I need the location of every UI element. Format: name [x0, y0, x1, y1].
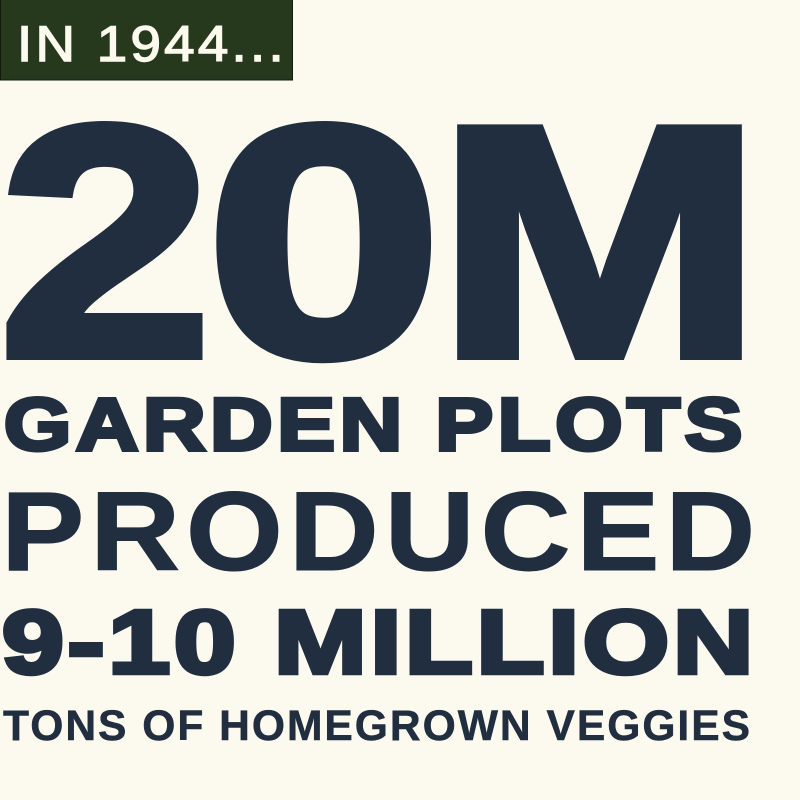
text: garden plots: GARDEN PLOTS	[4, 383, 747, 466]
digit 0: 0	[206, 58, 442, 425]
letter M: M	[437, 58, 762, 425]
text: tons of homegrown veggies: TONS OF HOMEGROWN VEGGIES	[3, 702, 752, 750]
year tag box	[0, 0, 292, 80]
digit 2: 2	[0, 58, 212, 425]
year tag text: IN 1944...	[17, 16, 287, 72]
headline number: 20M	[0, 58, 762, 425]
text: produced: PRODUCED	[1, 469, 761, 594]
text: 9-10 million: 9-10 MILLION	[2, 593, 757, 693]
year tag	[0, 0, 292, 80]
